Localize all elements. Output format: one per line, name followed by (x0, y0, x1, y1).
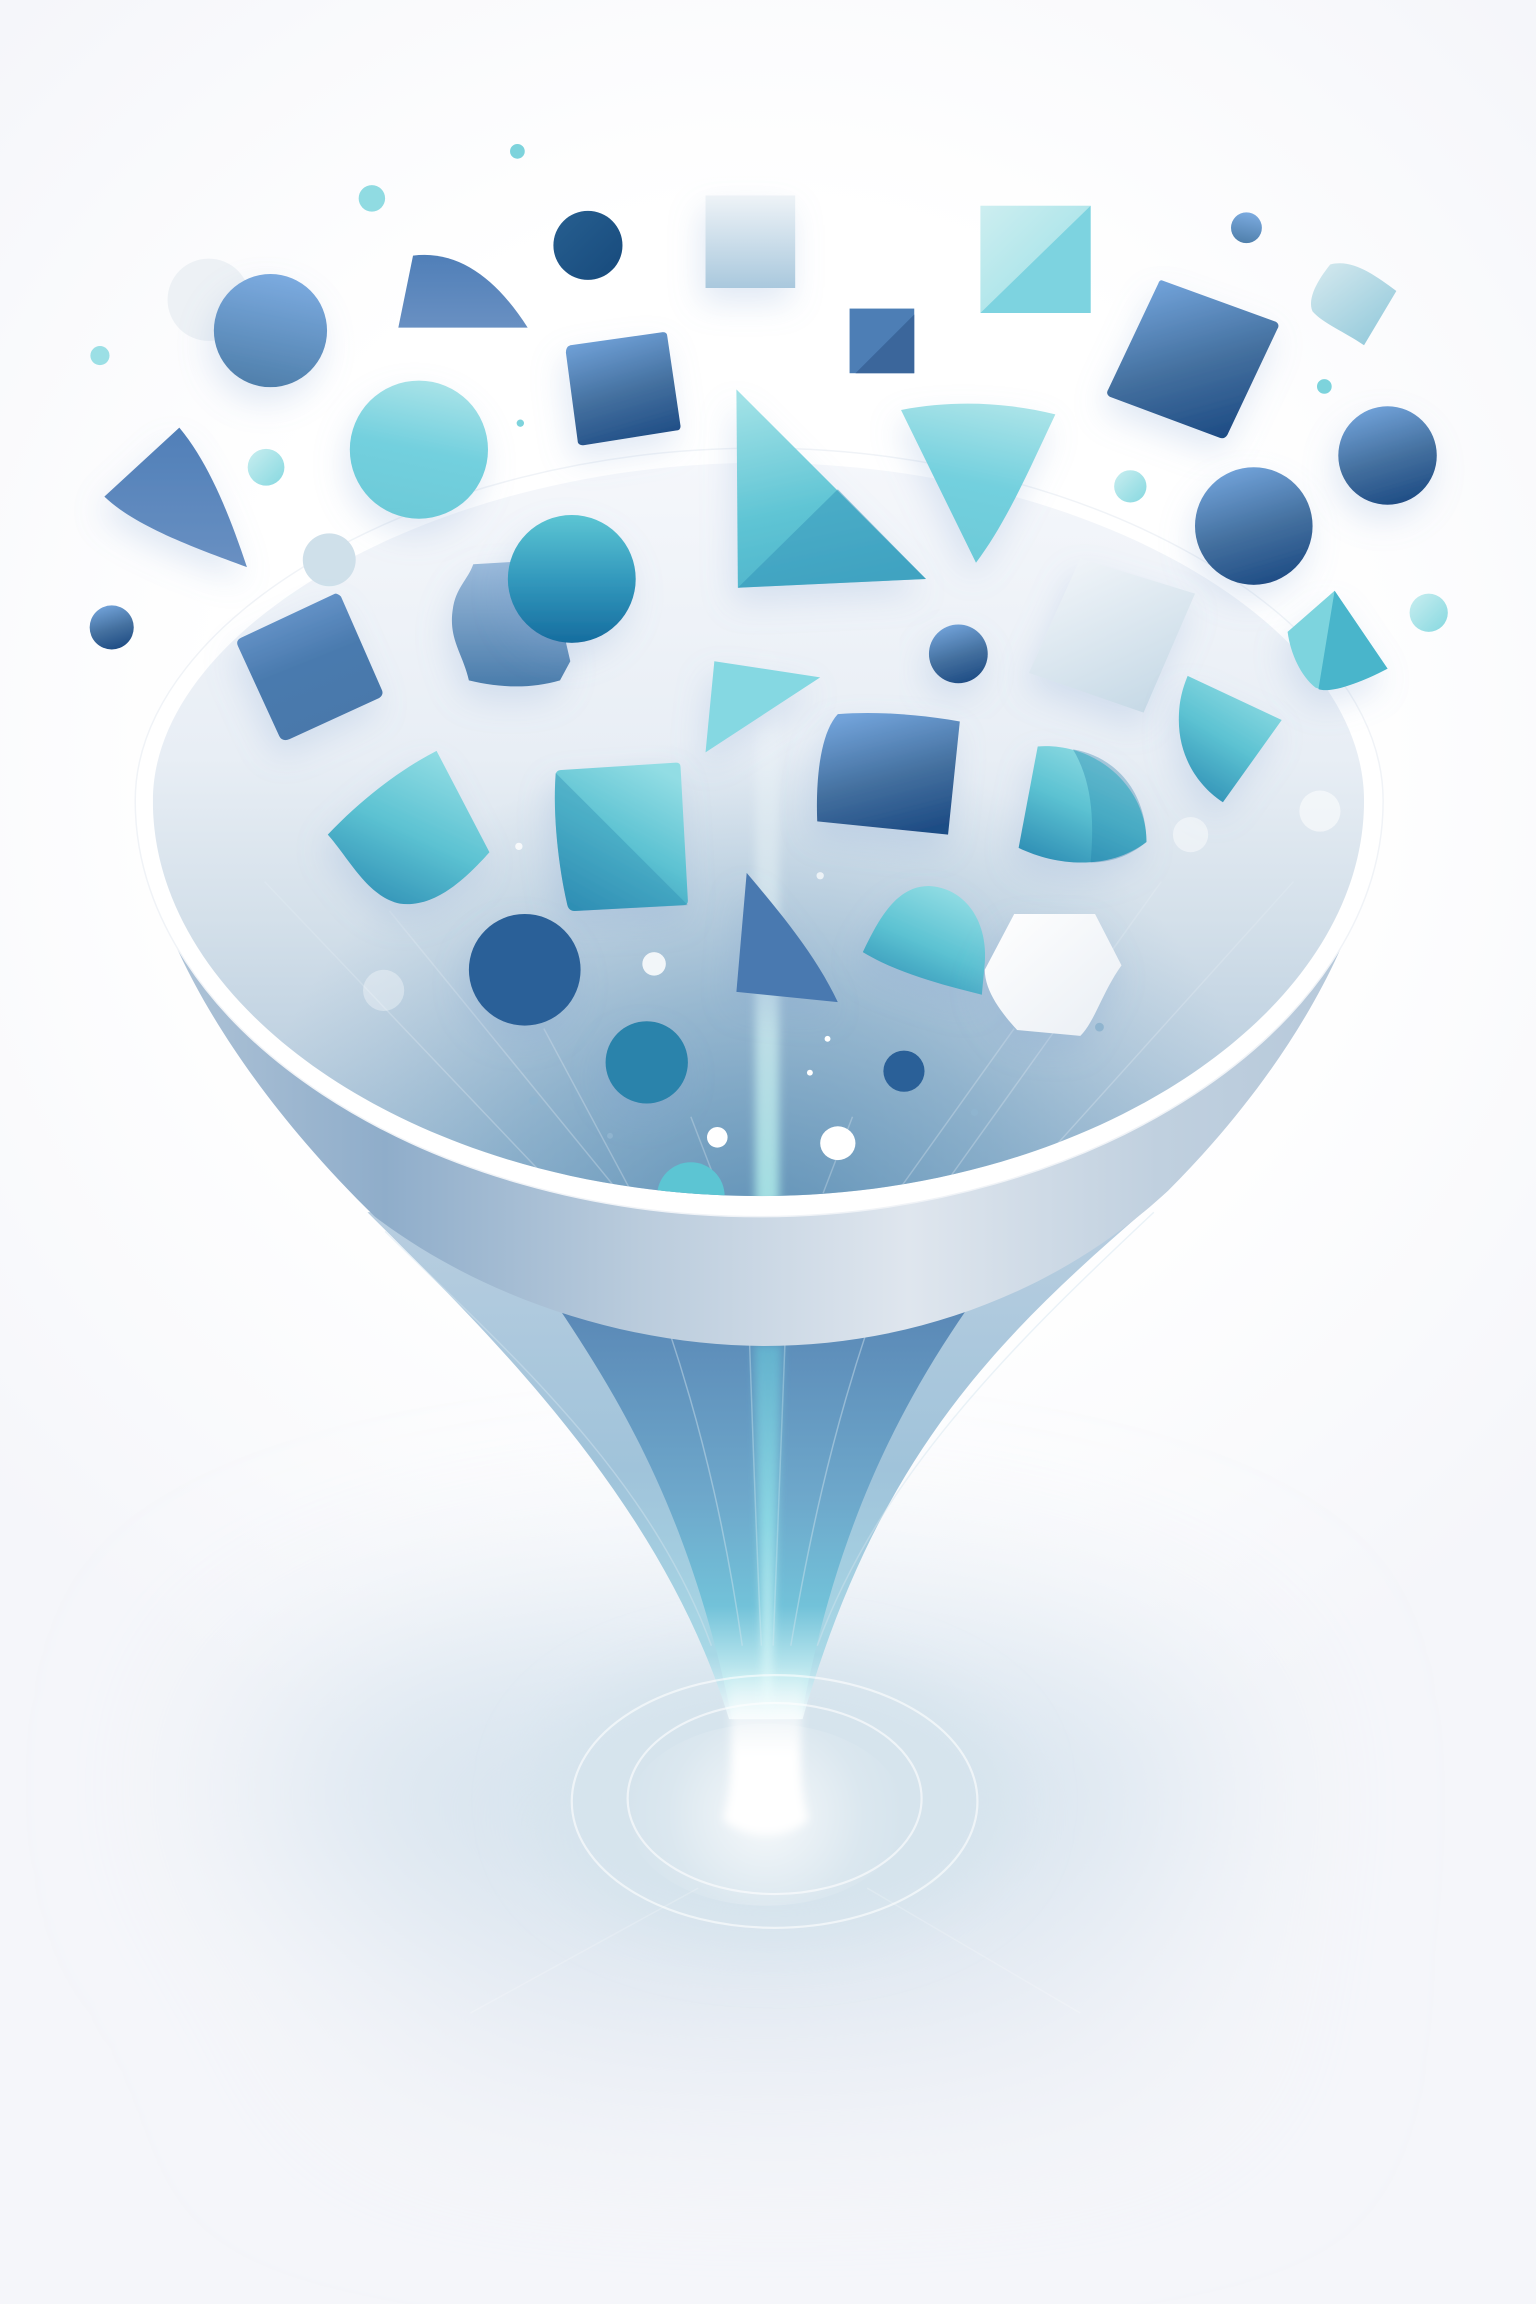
blue rounded square (566, 332, 681, 445)
inverted teal triangle (901, 404, 1055, 563)
blue circle large (1195, 467, 1313, 585)
floor rays (470, 1888, 1080, 2013)
teal kite right (1288, 591, 1388, 690)
funnel (132, 441, 1396, 1719)
bowl interior (153, 464, 1364, 1196)
pale tilted square (1029, 558, 1195, 713)
teal triangle centre (706, 661, 820, 752)
neck highlight (723, 1668, 808, 1835)
teal dots (90, 144, 1332, 427)
ripple rings (572, 1675, 977, 1928)
base glow and rings (470, 1668, 1080, 2013)
funnel stem outer (367, 1190, 1169, 1719)
pale teal dot right (1114, 470, 1146, 503)
blue circle (214, 274, 327, 387)
blob behind circle (452, 560, 570, 686)
teal rounded square (555, 763, 688, 911)
tilted blue square left (237, 594, 383, 740)
light teal circle (350, 381, 488, 519)
navy circle (553, 211, 622, 280)
navy circle lower (469, 914, 581, 1026)
teal circle lower (606, 1021, 688, 1104)
teal square (980, 206, 1091, 313)
blue rounded square centre (817, 713, 960, 835)
tilted blue square (1107, 280, 1278, 438)
teal D shape (1019, 746, 1146, 863)
glow (626, 1724, 905, 1906)
deep teal circle (508, 515, 636, 643)
stem light beam (754, 1344, 782, 1712)
floor shade inside rings (539, 1660, 1010, 1940)
pale circle (168, 259, 250, 341)
blue circle far right (1338, 406, 1437, 505)
floor shadow (250, 1624, 1220, 2087)
teal kite left (328, 751, 489, 904)
pale teal dot far right (1410, 594, 1448, 632)
big teal triangle (736, 389, 926, 588)
small blue square (850, 309, 914, 373)
centre light beam (756, 632, 779, 1205)
white dots (363, 791, 1341, 1160)
small blue dot (1231, 212, 1262, 243)
funnel stem inner (559, 1300, 973, 1719)
pale rounded kite (1311, 263, 1396, 345)
blue dot centre (929, 624, 988, 683)
funnel outer band (135, 801, 1383, 1346)
pale teal circle (248, 449, 284, 486)
blue triangle lower (736, 873, 838, 1002)
tiny dots (529, 1023, 1104, 1139)
left blue dot (90, 605, 134, 649)
white hexagon (985, 914, 1122, 1036)
teal wedge (863, 886, 985, 995)
rim (135, 448, 1383, 1217)
pale square (706, 195, 795, 288)
pale grey circle (303, 533, 356, 586)
teal shield (1179, 676, 1282, 802)
bowl lines (348, 937, 1210, 1194)
quarter sector (398, 255, 528, 328)
stem flow lines (385, 1212, 1154, 1646)
navy dot lower (883, 1051, 925, 1092)
blue sail (104, 428, 247, 567)
shapes (90, 144, 1448, 1160)
half-submerged teal circle (658, 1162, 724, 1196)
